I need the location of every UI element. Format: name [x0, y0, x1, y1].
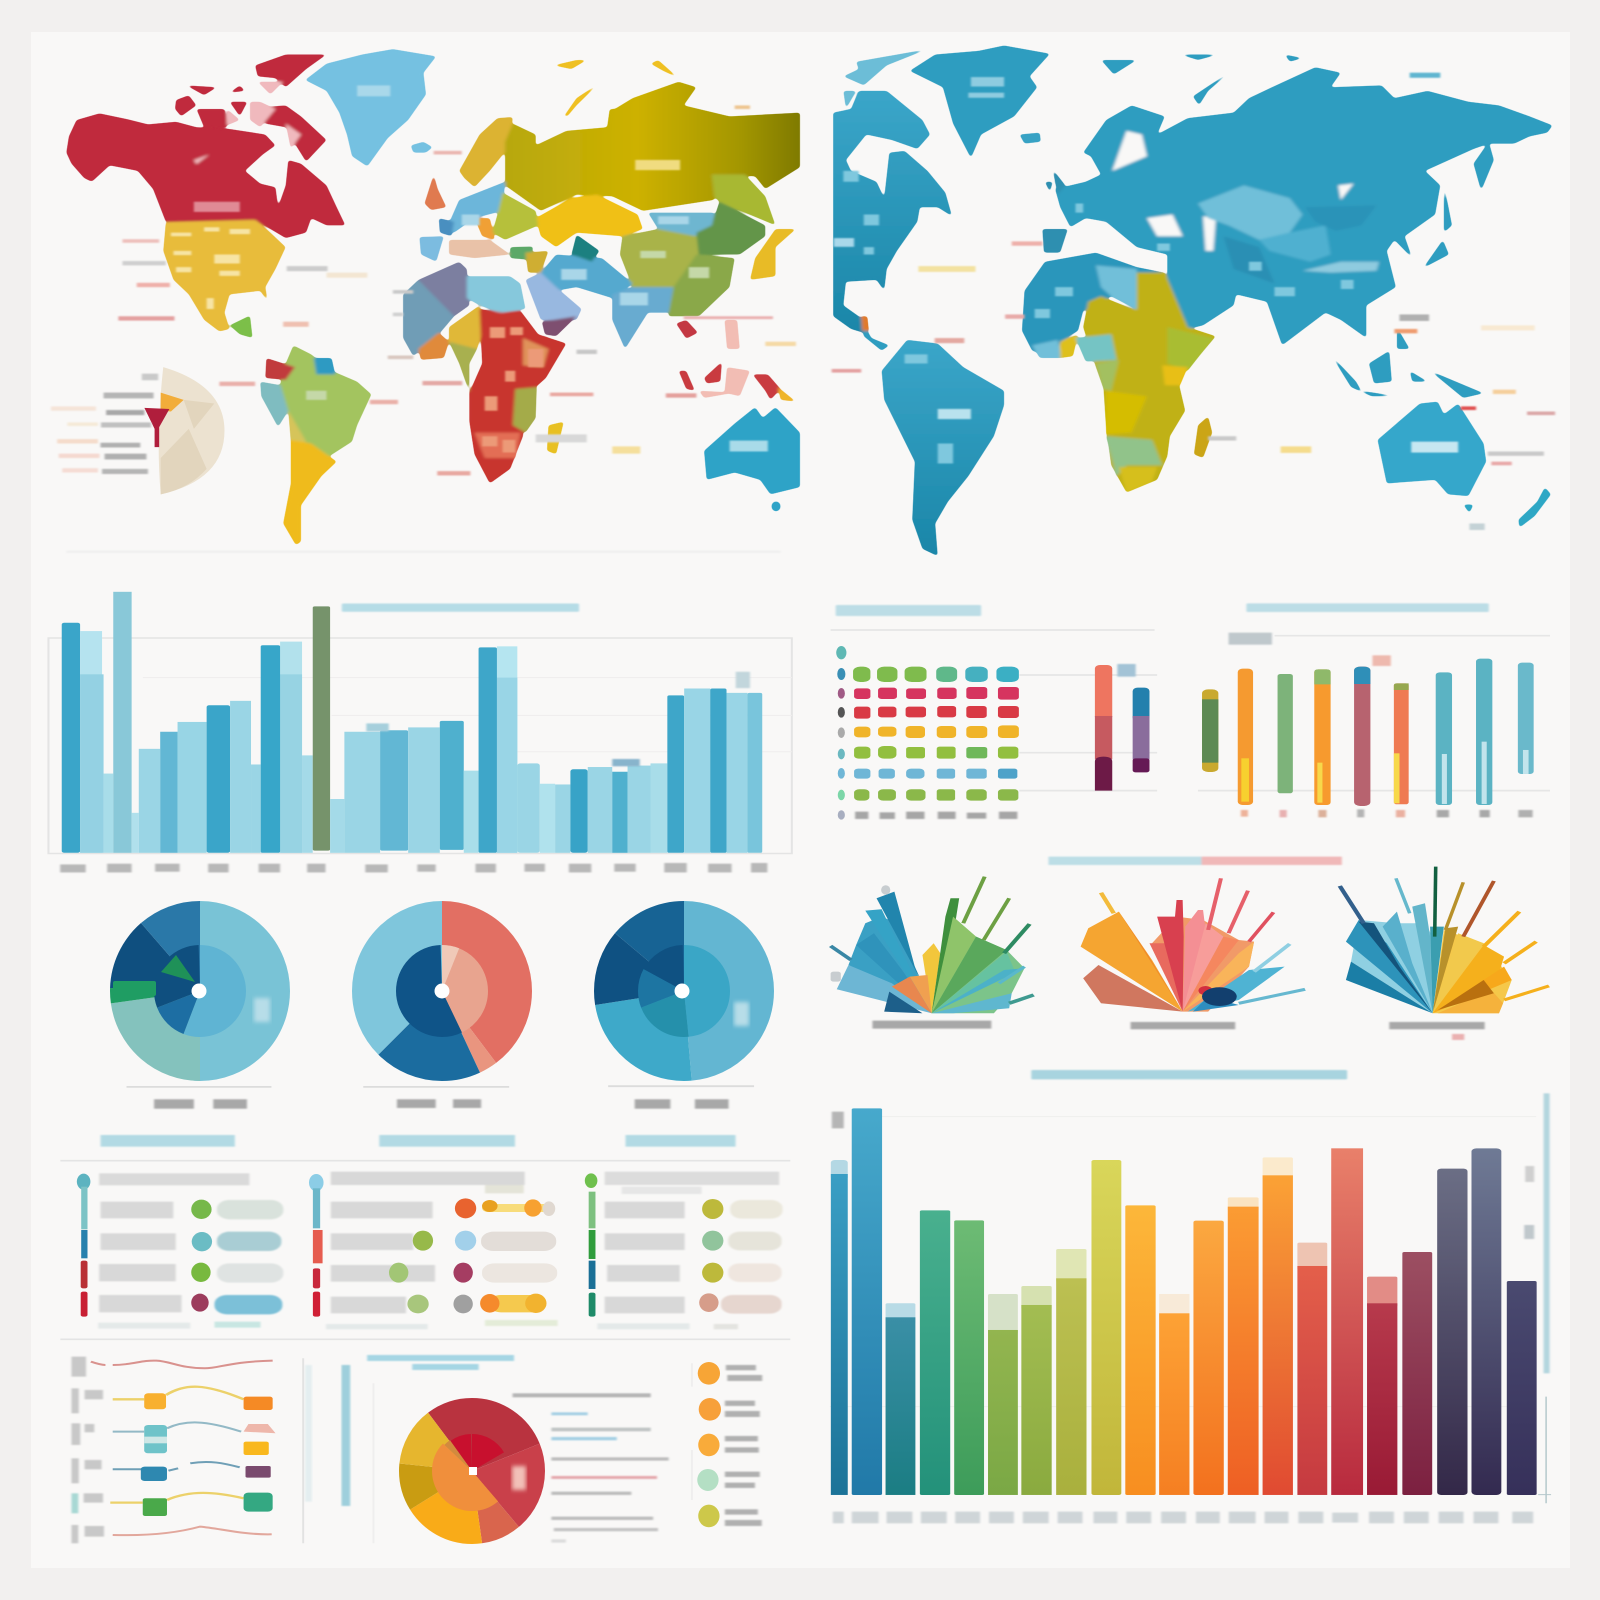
bar 7: [1354, 667, 1370, 806]
bar 4: [1238, 669, 1253, 805]
side legend orbs: [697, 1362, 721, 1527]
map: Australia: [704, 407, 800, 494]
map: Japan and Sakhalin: [1420, 142, 1494, 273]
map: Canada and Arctic islands: [66, 55, 345, 238]
small pie heading: [367, 1355, 514, 1370]
column 2 pills: [480, 1199, 557, 1313]
heading: left: [836, 605, 981, 616]
map: Eurasia: [1055, 67, 1553, 345]
map: Sub-Saharan Africa highlighted: [1060, 273, 1216, 493]
pie 4 value label: [512, 1466, 526, 1490]
map: islands pale tint: [699, 320, 750, 398]
map: Central America strip: [861, 320, 889, 351]
flow row 5: [110, 1493, 273, 1516]
flow row 2: [113, 1387, 273, 1410]
grey legend note: [1229, 633, 1272, 645]
flow row 6: [113, 1527, 272, 1535]
bars: [831, 1108, 1537, 1495]
map: Australia: [1378, 402, 1486, 496]
matrix: grey row: [855, 812, 1017, 819]
chart title: [342, 603, 579, 612]
map: New Zealand and Tasmania: [1463, 487, 1551, 528]
pie chart 2: [397, 946, 487, 1036]
matrix: green row: [853, 667, 1019, 682]
segment bar 1: [77, 1174, 90, 1317]
bar 2: [1133, 688, 1149, 772]
map: Iberia and British Isles: [1042, 169, 1068, 253]
map: Madagascar: [1194, 416, 1212, 458]
map: Novaya Zemlya and arctic islands: [554, 60, 679, 116]
map: Tasmania: [771, 501, 781, 511]
map: Scandinavia: [459, 117, 513, 187]
segment bar 3: [585, 1173, 597, 1317]
stacked bars: [1095, 655, 1534, 806]
map labels (illegible smudges): [66, 85, 796, 553]
bar 5: [1278, 674, 1293, 793]
bar 1 tag: [1117, 664, 1136, 677]
map: United States and Mexico: [163, 220, 286, 332]
fan chart 3: [1340, 867, 1549, 1013]
bar 11: [1518, 663, 1534, 774]
axis: [1538, 1397, 1551, 1503]
fan section heading: [1048, 857, 1342, 865]
bar 3: [1202, 689, 1218, 772]
matrix: lime row: [854, 746, 1018, 759]
flow row 1: [91, 1361, 273, 1368]
legend: half pie with funnel: [144, 367, 224, 494]
fan chart 2: [1081, 878, 1305, 1012]
column 2 text: [326, 1172, 558, 1329]
bar 8 tag: [1372, 655, 1391, 666]
map: Russia: [505, 82, 800, 211]
panel: blue world map with Africa highlighted: [832, 45, 1555, 556]
map: land masses: [833, 45, 1553, 556]
column 1 text: [98, 1173, 261, 1329]
pie chart 4: [436, 1434, 508, 1508]
map: Central America: [230, 316, 253, 338]
flow row 4: [113, 1462, 271, 1481]
gridlines: [830, 1117, 1536, 1407]
pie 2 centre: [434, 984, 450, 998]
vertical rules and vertical label: [303, 1358, 692, 1543]
panel: rainbow bar chart: [830, 1070, 1551, 1523]
map: Sahara light region: [1096, 265, 1139, 311]
map: North Africa: [1022, 253, 1165, 358]
pie 1 centre: [192, 984, 206, 998]
bar 6: [1314, 669, 1331, 805]
pie 1 value label: [254, 998, 270, 1022]
map: Arctic islands: [843, 49, 928, 109]
column 1 pills: [214, 1200, 283, 1314]
map: South America: [260, 345, 371, 545]
side legend labels: [725, 1365, 762, 1526]
bar 9: [1436, 672, 1452, 805]
panel: multicolour world map: [51, 49, 800, 553]
column 2 dots: [389, 1198, 476, 1313]
map: Central America orange mark: [861, 316, 869, 331]
bars pale caps: [831, 1157, 1397, 1334]
map: North America: [833, 91, 952, 334]
key column 2: [309, 1172, 558, 1329]
flow labels: [72, 1357, 104, 1543]
map: Central Asia regions: [1198, 185, 1379, 284]
bar 8: [1394, 683, 1409, 804]
key column 1: [77, 1173, 283, 1329]
value and axis labels (illegible smudges): [60, 672, 767, 872]
map: West Africa coast: [1032, 340, 1061, 358]
map: land masses: [66, 49, 800, 545]
pie captions: [154, 1099, 729, 1109]
map: land surface flecks: [171, 214, 709, 453]
panel: dot matrix, stacked bars and fan charts: [831, 603, 1550, 1040]
pie chart 3: [639, 946, 729, 1036]
matrix: red row: [854, 706, 1019, 719]
map: South America: [882, 340, 1004, 556]
panel: blue bar chart: [48, 592, 792, 1109]
map: Iceland: [411, 142, 433, 153]
map: inland seas: [1101, 131, 1354, 251]
bars: [62, 592, 762, 853]
map labels (illegible smudges): [832, 73, 1555, 530]
column 3 text: [597, 1172, 779, 1329]
pie 3 centre: [674, 984, 690, 998]
column 3 dots: [699, 1199, 723, 1312]
small pie text lines: [513, 1393, 669, 1543]
horizontal rules: [60, 1161, 790, 1339]
chart frame and gridlines: [48, 638, 792, 854]
flow diagram: [72, 1357, 276, 1543]
map: Southeast Asian islands: [1331, 327, 1484, 398]
map: Novaya Zemlya and arctic islands: [1101, 55, 1303, 105]
chart title: [1031, 1070, 1347, 1079]
gridlines: [143, 678, 792, 752]
matrix: green row 2: [854, 789, 1018, 801]
segment bar 2: [309, 1174, 324, 1317]
matrix: crimson row: [854, 687, 1019, 700]
heading: right: [1246, 603, 1489, 612]
map: New Guinea orange tip: [778, 387, 796, 402]
dot matrix: [836, 646, 1019, 820]
matrix: yellow row: [854, 725, 1019, 738]
flow row 3: [113, 1422, 276, 1455]
map: Asia countries: [510, 174, 796, 349]
bar 1: [1095, 665, 1112, 791]
heading rules: [831, 630, 1550, 791]
key column 3: [585, 1172, 783, 1329]
matrix: blue row: [854, 769, 1017, 779]
column 3 pills: [721, 1200, 783, 1314]
pie 1 green band edge: [113, 981, 156, 996]
pie 4 centre: [469, 1467, 477, 1475]
panel: key tables and small pie: [60, 1135, 790, 1543]
map: Africa countries: [403, 262, 566, 483]
stacked bar labels: [1241, 809, 1533, 817]
map: Europe countries: [419, 174, 538, 262]
pie base lines: [127, 1084, 754, 1089]
column headings: [101, 1135, 736, 1147]
matrix: row key: [836, 646, 846, 820]
map: land surface flecks: [843, 171, 1354, 463]
fan chart 1: [831, 877, 1034, 1013]
map: Greenland: [910, 45, 1050, 158]
column 1 dots: [191, 1200, 212, 1312]
bar 10: [1476, 659, 1492, 805]
pie 1 green wedge: [161, 955, 195, 982]
axis and right-side labels (illegible smudges): [832, 1093, 1550, 1523]
fan captions: [872, 1021, 1485, 1040]
map: Greenland: [305, 49, 436, 166]
map: Iceland: [1019, 133, 1041, 144]
pie chart 1: [155, 946, 245, 1036]
pie 3 value label: [734, 1002, 749, 1026]
legend labels: [51, 374, 158, 474]
map: Southeast Asia islands: [679, 362, 781, 400]
